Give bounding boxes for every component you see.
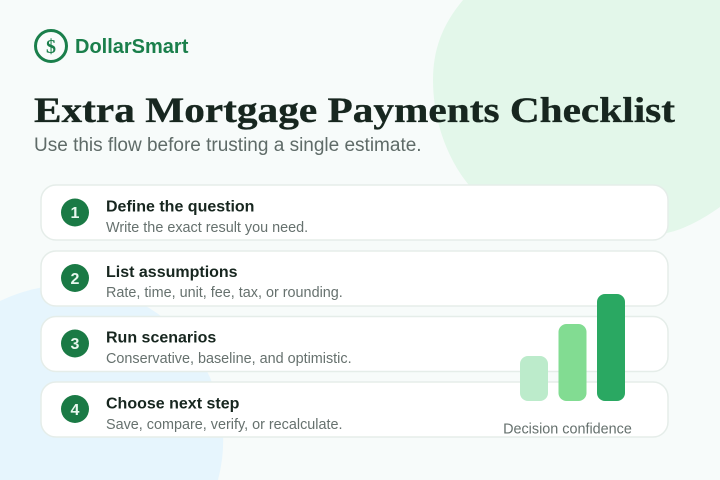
subtitle: Use this flow before trusting a single estimate. (34, 135, 422, 156)
step 3 card: 3 (71, 336, 80, 353)
step 4 card: 4 (71, 402, 80, 419)
chart label: Decision confidence (503, 422, 632, 438)
icon: dollar coin (36, 30, 66, 62)
step 2 card: List assumptions (106, 264, 238, 281)
step 2 card: 2 (71, 271, 80, 288)
step 2 card (41, 251, 668, 306)
step 3 card: Conservative, baseline, and optimistic. (106, 351, 352, 367)
medium bar (558, 324, 586, 401)
step 1 card: 1 (71, 205, 80, 222)
step 1 card (41, 185, 668, 240)
low bar (520, 356, 548, 401)
high bar (597, 294, 625, 401)
step 2 card: Rate, time, unit, fee, tax, or rounding. (106, 285, 343, 301)
bar chart: decision confidence (503, 294, 632, 438)
title: Extra Mortgage Payments Checklist (34, 90, 675, 130)
step 1 card: Define the question (106, 198, 254, 216)
brand name: DollarSmart (75, 36, 189, 58)
checklist steps (41, 185, 668, 437)
step 3 card (41, 316, 668, 372)
logo: DollarSmart (36, 30, 189, 62)
step 4 card: Choose next step (106, 396, 240, 412)
icon: dollar coin: $ (46, 36, 56, 58)
step 3 card: Run scenarios (106, 330, 216, 346)
step 4 card (41, 382, 668, 437)
step 4 card: Save, compare, verify, or recalculate. (106, 417, 342, 433)
step 1 card: Write the exact result you need. (106, 220, 308, 236)
